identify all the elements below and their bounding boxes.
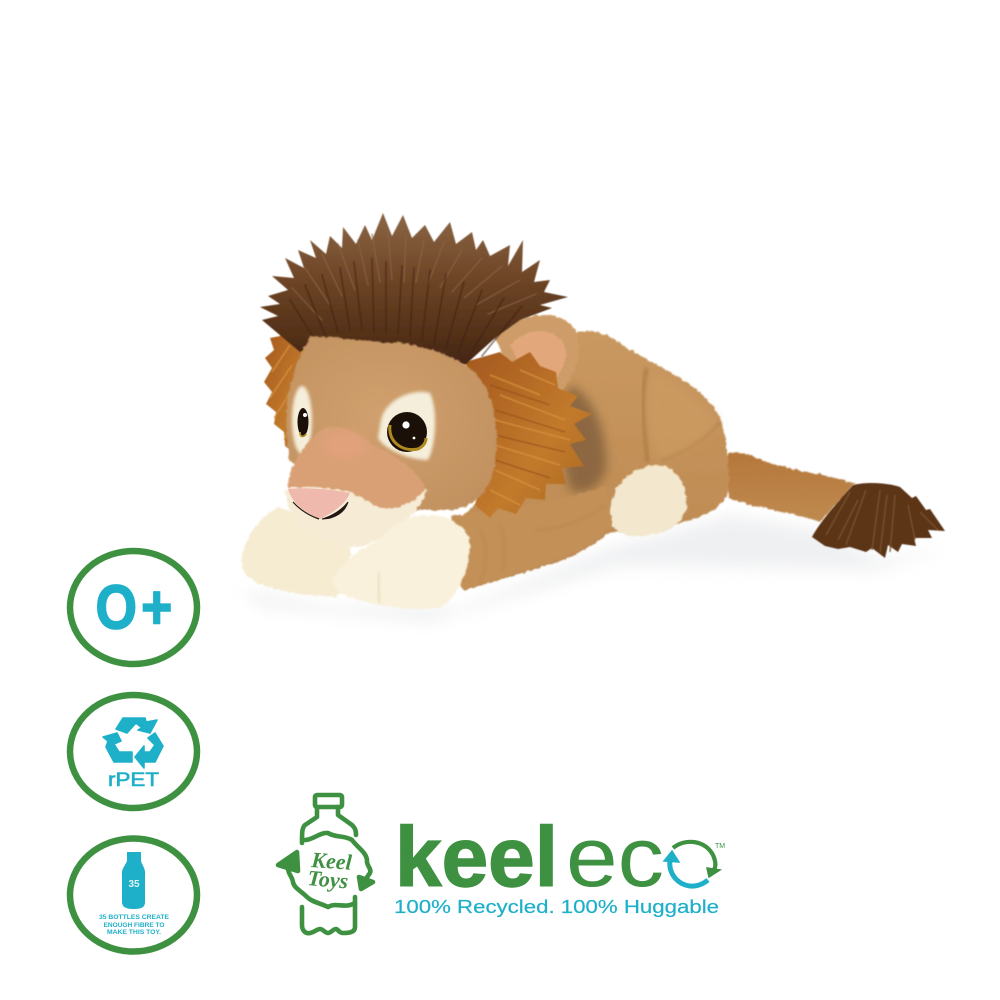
Keel Toys wordmark xyxy=(307,847,353,894)
recycling o xyxy=(664,842,720,886)
snout highlight xyxy=(323,431,367,459)
rPET label: rPET xyxy=(108,770,159,791)
lion body xyxy=(440,331,728,590)
mouth xyxy=(293,502,319,519)
keeleco wordmark xyxy=(394,810,725,917)
Keel Toys wordmark: Toys xyxy=(307,865,349,894)
plush lion toy xyxy=(242,213,945,609)
arm creases xyxy=(480,505,606,582)
cream front left paw xyxy=(242,507,350,597)
age badge xyxy=(70,551,197,664)
bottles caption: MAKE THIS TOY. xyxy=(107,929,161,936)
lower arrow head xyxy=(278,852,298,871)
keel bold text: keel xyxy=(395,810,558,904)
trademark: TM xyxy=(715,843,725,850)
front arm xyxy=(440,485,612,590)
paw toe creases xyxy=(378,572,380,603)
dark brown mane xyxy=(260,213,568,365)
cream front right paw xyxy=(333,515,470,609)
keeleco bottle logo xyxy=(278,795,373,933)
icon: bottle xyxy=(122,852,145,909)
mane mid strands xyxy=(292,232,536,320)
bottle cap xyxy=(315,795,342,807)
bottles caption: 35 BOTTLES CREATE xyxy=(99,914,169,921)
bottle base xyxy=(302,897,355,933)
tagline: 100% Recycled. 100% Huggable xyxy=(394,896,719,917)
pink nose xyxy=(288,488,350,519)
lower recycling wave xyxy=(288,868,355,907)
Keel Toys wordmark: Keel xyxy=(310,847,353,875)
rear cream paw xyxy=(610,465,686,536)
bottles caption xyxy=(99,914,169,936)
ec light text: ec xyxy=(566,810,664,904)
dark shoulder patch xyxy=(555,385,606,492)
snout xyxy=(288,427,425,508)
orange mane, right side xyxy=(465,352,592,518)
upper recycling wave xyxy=(305,833,370,880)
ear xyxy=(495,315,579,390)
chin and muzzle cream xyxy=(285,478,427,547)
bottles caption: ENOUGH FIBRE TO xyxy=(104,922,165,929)
right eye xyxy=(387,412,427,452)
mouth wedge xyxy=(322,502,348,519)
upper arrow head xyxy=(359,877,373,889)
head xyxy=(286,337,496,510)
bottles badge xyxy=(70,838,197,952)
left eye xyxy=(298,408,308,436)
tail xyxy=(725,452,855,522)
right eye patch xyxy=(378,392,435,460)
left eye patch xyxy=(292,386,312,454)
ground shadow xyxy=(240,515,950,622)
age text: O+ xyxy=(96,574,172,642)
orange mane, left side xyxy=(264,326,312,452)
rPET badge xyxy=(70,695,197,808)
bottle number: 35 xyxy=(128,879,140,890)
tail tuft xyxy=(812,483,945,558)
icon: recycling arrows xyxy=(103,718,163,768)
bottle shoulders xyxy=(302,807,356,843)
mane dark strands xyxy=(290,258,522,356)
body shading: seams and haunch xyxy=(643,368,720,462)
